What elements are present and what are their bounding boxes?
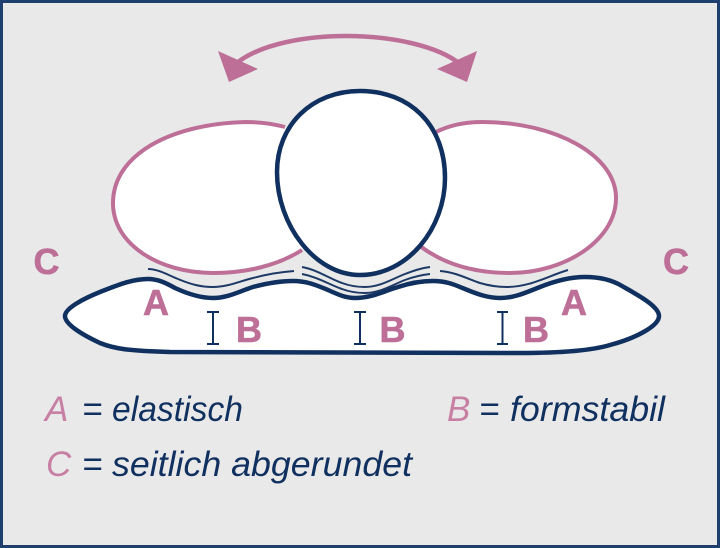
legend: C = seitlich abgerundet: C [46,445,72,484]
labels: diagram letters: A [143,282,169,323]
labels: diagram letters: B [236,309,262,350]
labels: diagram letters: A [561,282,587,323]
labels: diagram letters: C [663,241,689,282]
arrow: double-headed movement arrow [218,36,477,82]
center round body [277,91,445,275]
height marker: center [354,312,366,344]
mattress shape [65,277,659,353]
height marker: left [207,312,219,344]
labels: diagram letters: B [380,309,406,350]
legend: A = elastisch: = [82,390,102,429]
labels: diagram letters [34,241,689,350]
contour line: left [148,269,294,287]
contour line: right [440,270,568,287]
legend: A = elastisch: elastisch [112,390,243,429]
labels: diagram letters: B [523,309,549,350]
legend: C = seitlich abgerundet: seitlich abgerundet [112,445,413,484]
left ellipse body [113,122,302,273]
legend: C = seitlich abgerundet: = [82,445,102,484]
legend: A = elastisch: A [43,390,68,429]
legend: B = formstabil: formstabil [510,390,666,429]
contour lines: center [302,267,430,293]
legend: A = elastisch [43,390,243,429]
height marker: right [497,312,508,344]
legend: B = formstabil: = [479,390,499,429]
labels: diagram letters: C [34,241,60,282]
right ellipse body [420,122,616,273]
legend: B = formstabil [447,390,666,429]
legend: B = formstabil: B [447,390,470,429]
